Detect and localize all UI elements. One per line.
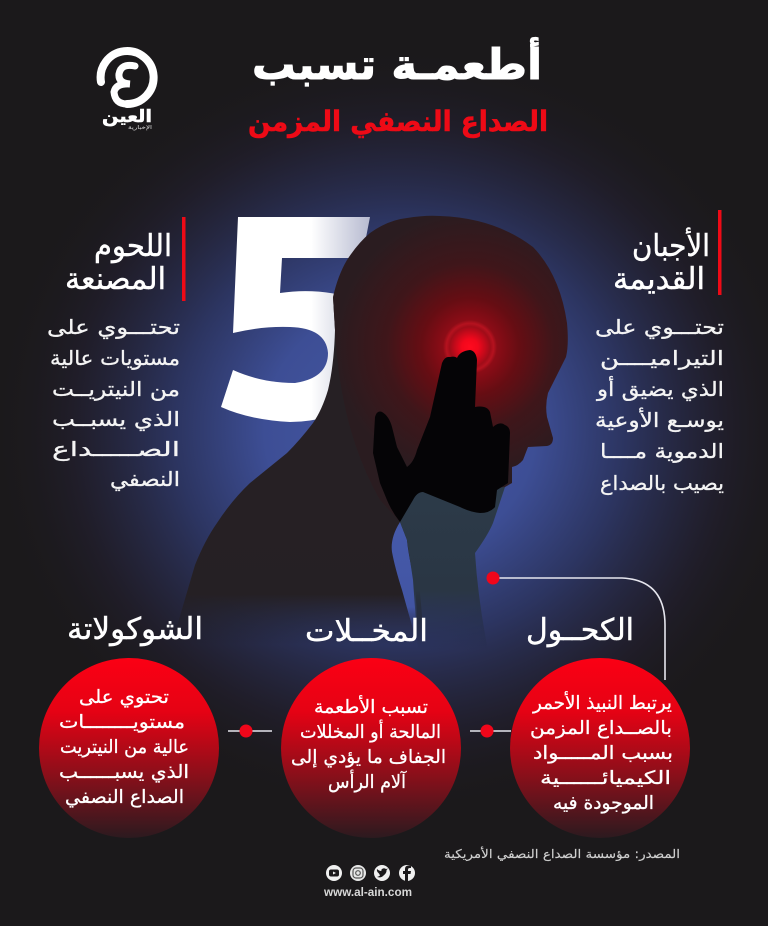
- panel: alcohol: [510, 613, 690, 838]
- head: [333, 216, 568, 522]
- text block: الذي يسبــــــب: [59, 762, 189, 783]
- text block: النصفي: [110, 467, 180, 492]
- text block: [595, 315, 724, 495]
- heading: الكحــول: [526, 613, 634, 648]
- text block: الجفاف ما يؤدي إلى: [291, 747, 446, 768]
- heading: [65, 229, 172, 297]
- panel: aged cheese: [595, 210, 724, 495]
- text block: مستويــــــــات: [59, 712, 185, 733]
- text block: تحتـــوي على: [47, 315, 180, 340]
- text block: [530, 691, 673, 814]
- text block: الذي يضيق أو: [596, 376, 724, 402]
- text block: الكيميائــــــية: [540, 768, 671, 789]
- text block: من النيتريــت: [52, 377, 180, 401]
- text block: بالصــداع المزمن: [530, 718, 672, 739]
- icon: twitter: [374, 865, 390, 881]
- text block: عالية من النيتريت: [60, 737, 189, 758]
- panel: chocolate: [39, 612, 219, 838]
- red circle: [39, 658, 219, 838]
- text block: يرتبط النبيذ الأحمر: [532, 691, 672, 714]
- text block: آلام الرأس: [328, 769, 407, 793]
- text block: الصداع النصفي: [65, 787, 184, 808]
- heading: المصنعة: [65, 262, 166, 297]
- text block: يصيب بالصداع: [600, 471, 724, 495]
- subtitle: الصداع النصفي المزمن: [248, 105, 548, 138]
- heading: القديمة: [613, 262, 705, 297]
- red circle: [281, 658, 461, 838]
- accent bar: [182, 217, 186, 301]
- heading: اللحوم: [94, 229, 172, 264]
- title: أطعمـة تسبب: [252, 37, 542, 89]
- logo: Al-Ain: [101, 51, 154, 131]
- logo: Al-Ain: الإخبارية: [128, 125, 153, 131]
- number 5: [221, 217, 370, 422]
- red circle: [510, 658, 690, 838]
- heading: الأجبان: [632, 226, 710, 264]
- text block: يوسـع الأوعية: [595, 408, 724, 432]
- text block: [47, 315, 180, 492]
- icon: instagram: [350, 865, 366, 881]
- text block: تحتـــوي على: [595, 315, 724, 340]
- connector: figure to alcohol: [486, 572, 665, 680]
- text block: [59, 687, 189, 808]
- body: [170, 297, 425, 650]
- source note: المصدر: مؤسسة الصداع النصفي الأمريكية: [444, 846, 680, 862]
- website url: www.al-ain.com: [323, 887, 412, 899]
- text block: مستويات عالية: [50, 346, 180, 370]
- text block: بسبب المـــــواد: [533, 743, 673, 764]
- panel: processed meats: [47, 217, 186, 492]
- heading: الشوكولاتة: [67, 612, 203, 647]
- forearm: [400, 480, 505, 650]
- connector: pickles to chocolate: [228, 724, 272, 738]
- panel: pickles: [281, 614, 461, 838]
- accent bar: [718, 210, 722, 295]
- text block: المالحة أو المخللات: [300, 719, 441, 743]
- logo: Al-Ain: العين: [102, 107, 152, 127]
- heading: المخــلات: [305, 614, 428, 649]
- heading: [613, 226, 710, 297]
- blue gap between body and arm: [392, 522, 417, 640]
- hand: [373, 350, 510, 522]
- illustration: head silhouette with migraine: [170, 216, 568, 650]
- text block: التيراميــــن: [600, 346, 724, 370]
- icon: youtube: [326, 865, 342, 881]
- text block: [291, 695, 446, 793]
- text block: الموجودة فيه: [553, 793, 654, 814]
- icon: facebook: [399, 865, 415, 881]
- connector: alcohol to pickles: [470, 724, 511, 738]
- text block: تسبب الأطعمة: [314, 695, 428, 718]
- text block: الدموية مــــا: [600, 439, 724, 463]
- text block: تحتوي على: [79, 687, 169, 708]
- text block: الذي يسبــب: [52, 407, 180, 432]
- text block: الصـــــداع: [52, 437, 180, 461]
- social icons: [326, 865, 415, 881]
